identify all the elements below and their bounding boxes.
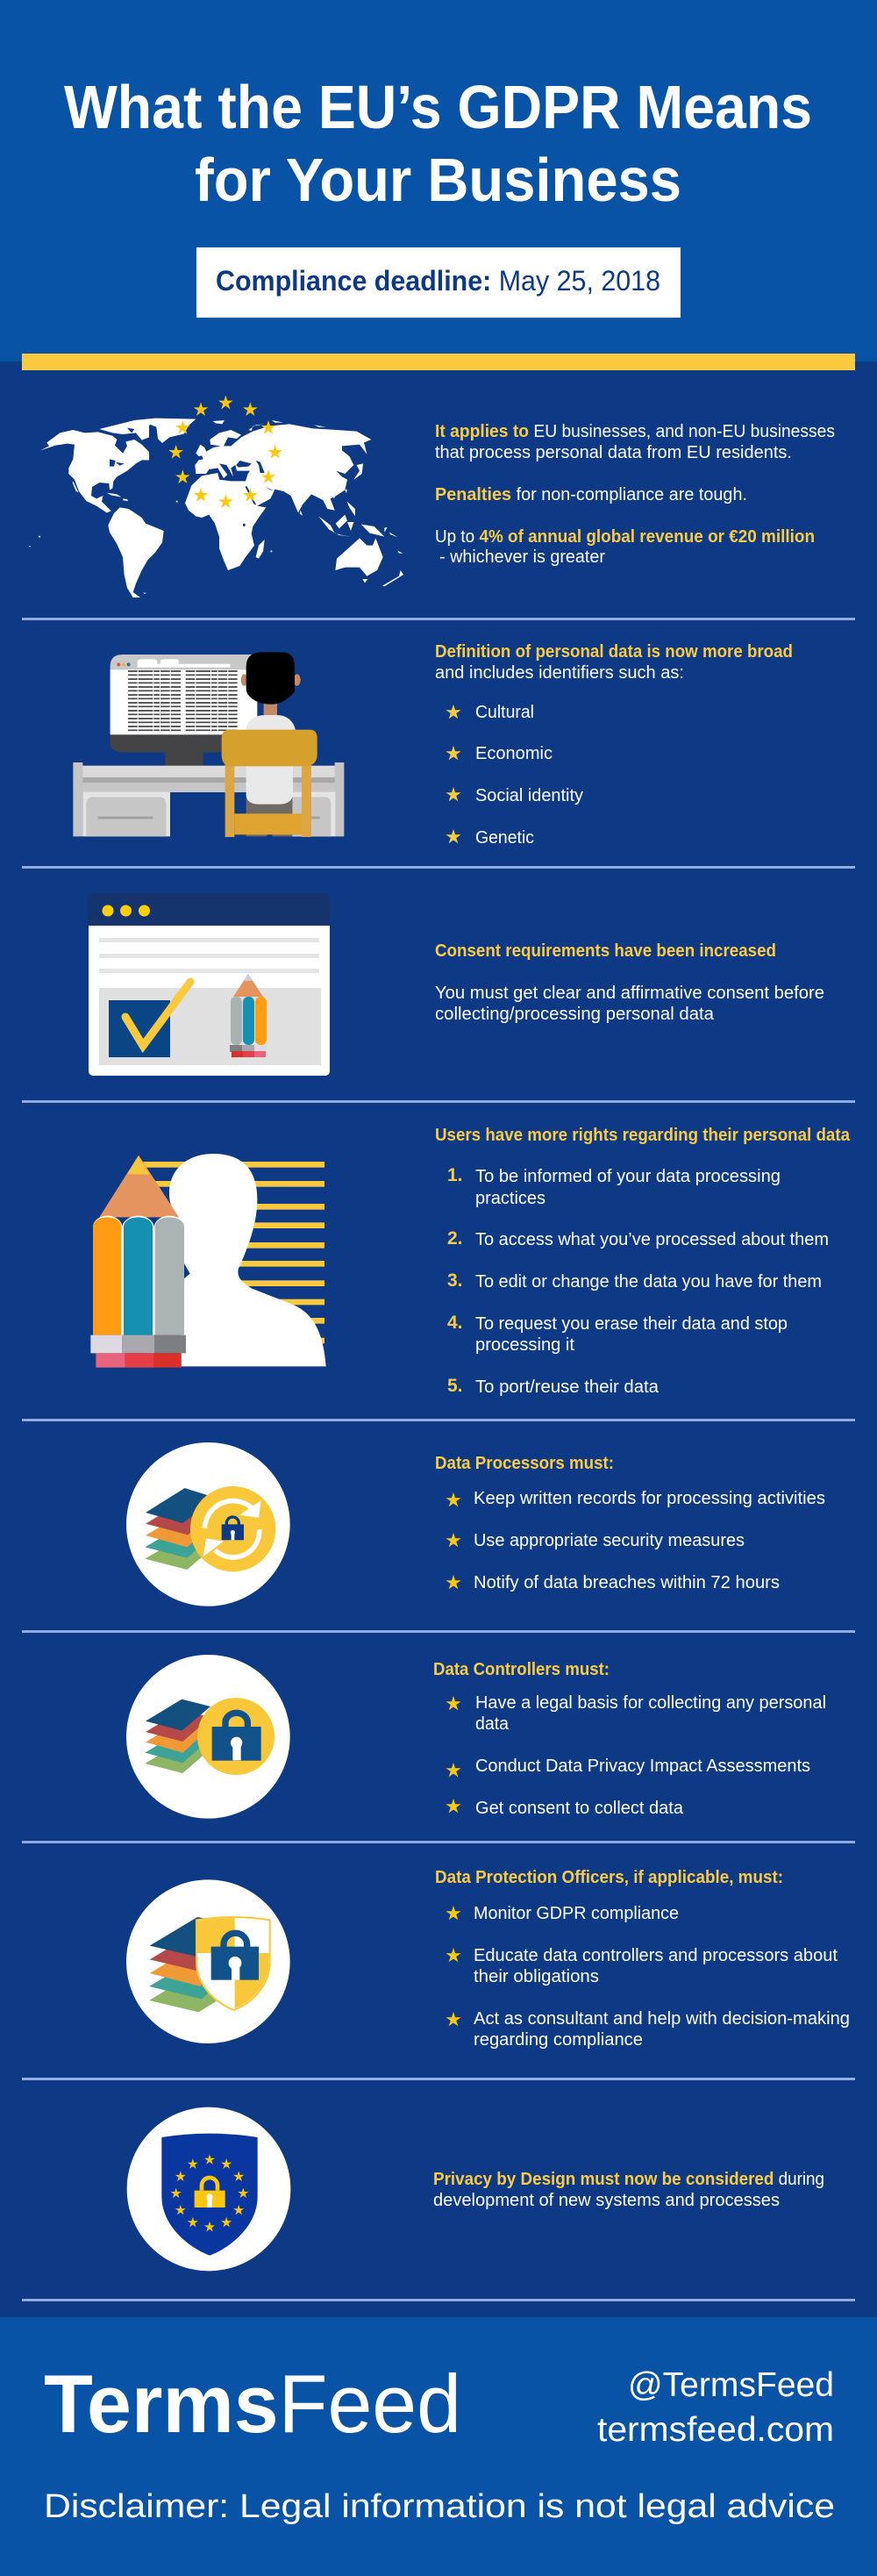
text: data protection officers list: Data Protection Officers, if applicable, must: <box>435 1868 783 1887</box>
social handle and website: @TermsFeed <box>628 2366 834 2404</box>
icon: pencil and person silhouette <box>90 1154 326 1368</box>
text: privacy by design: development of new systems and processes <box>433 2191 780 2210</box>
text: data controllers list: Conduct Data Privacy Impact Assessments <box>475 1757 810 1776</box>
text: personal data definition: and includes identifiers such as: <box>435 663 684 683</box>
disclaimer: Disclaimer: Legal information is not legal advice <box>44 2488 835 2525</box>
text: data controllers list <box>433 1660 826 1818</box>
text: personal data definition: Social identity <box>475 786 583 805</box>
text: user rights list: To be informed of your data processing <box>475 1167 781 1186</box>
icon: layers with padlock <box>126 1655 290 1819</box>
title: What the EU’s GDPR Means <box>64 73 812 141</box>
text: data processors list: Notify of data breaches within 72 hours <box>474 1573 780 1592</box>
text: user rights list: Users have more rights regarding their personal data <box>435 1126 851 1145</box>
text: data controllers list: data <box>475 1714 510 1734</box>
text: data processors list: Use appropriate security measures <box>474 1531 745 1550</box>
panel: data controllers <box>126 1655 826 1819</box>
yellow divider bar <box>22 354 855 370</box>
text: consent <box>435 941 824 1024</box>
text: scope and penalties: Up to 4% of annual global revenue or €20 million <box>435 527 815 547</box>
text: user rights list: To edit or change the data you have for them <box>475 1272 822 1292</box>
icon: layers with sync lock <box>126 1442 290 1606</box>
title: for Your Business <box>195 146 681 214</box>
text: user rights list: To port/reuse their data <box>475 1377 660 1397</box>
icon: layers with shield <box>126 1879 290 2043</box>
text: user rights list: 1. <box>447 1165 463 1185</box>
text: scope and penalties: It applies to EU businesses, and non-EU businesses <box>435 422 835 441</box>
text: consent: You must get clear and affirmative consent before <box>435 984 824 1003</box>
text: data controllers list: Have a legal basis for collecting any personal <box>475 1693 826 1713</box>
text: data protection officers list: their obligations <box>474 1967 599 1986</box>
text: user rights list: processing it <box>475 1335 574 1355</box>
text: data protection officers list: Act as consultant and help with decision-making <box>474 2009 850 2029</box>
text: user rights list: To access what you’ve processed about them <box>475 1230 829 1249</box>
text: personal data definition <box>435 642 793 848</box>
panel: data processors <box>126 1442 825 1606</box>
text: user rights list: 3. <box>447 1270 463 1291</box>
text: data protection officers list: Monitor GDPR compliance <box>474 1904 679 1923</box>
footer band <box>0 2317 877 2576</box>
header band <box>0 0 877 361</box>
text: scope and penalties <box>435 422 835 567</box>
text: scope and penalties: - whichever is greater <box>439 547 605 567</box>
title <box>64 73 812 214</box>
text: consent: collecting/processing personal data <box>435 1005 715 1024</box>
panel: scope and penalties <box>29 396 835 597</box>
text: personal data definition: Definition of personal data is now more broad <box>435 642 793 662</box>
panel: user rights <box>90 1126 851 1397</box>
compliance deadline box: Compliance deadline: May 25, 2018 <box>216 265 660 297</box>
text: user rights list <box>435 1126 851 1397</box>
text: user rights list: practices <box>475 1189 545 1208</box>
icon: person at computer <box>73 652 344 837</box>
text: user rights list: 5. <box>447 1376 463 1396</box>
text: scope and penalties: that process personal data from EU residents. <box>435 443 792 462</box>
text: user rights list: 4. <box>447 1313 463 1333</box>
compliance deadline box <box>196 247 681 318</box>
text: data processors list: Data Processors must: <box>435 1454 614 1473</box>
logo: TermsFeed: TermsFeed <box>44 2358 461 2450</box>
text: data processors list <box>435 1454 825 1592</box>
social handle and website: termsfeed.com <box>597 2411 834 2449</box>
icon: world map with EU stars <box>29 396 403 597</box>
icon: EU shield with padlock <box>127 2107 290 2271</box>
text: data processors list: Keep written records for processing activities <box>474 1489 825 1508</box>
panel: data protection officers <box>126 1868 850 2050</box>
social handle and website <box>597 2366 834 2449</box>
text: privacy by design <box>433 2170 824 2210</box>
text: scope and penalties: Penalties for non-compliance are tough. <box>435 485 747 504</box>
text: user rights list: 2. <box>447 1228 463 1249</box>
text: privacy by design: Privacy by Design must now be considered during <box>433 2170 824 2189</box>
icon: consent form window <box>88 893 330 1076</box>
panel: personal data definition <box>73 642 793 848</box>
text: personal data definition: Genetic <box>475 828 534 848</box>
text: data controllers list: Get consent to collect data <box>475 1799 684 1818</box>
text: data controllers list: Data Controllers must: <box>433 1660 610 1679</box>
text: data protection officers list <box>435 1868 850 2050</box>
panel: consent <box>88 893 824 1076</box>
text: data protection officers list: Educate data controllers and processors about <box>474 1946 838 1965</box>
panel: privacy by design <box>127 2107 824 2271</box>
text: personal data definition: Cultural <box>475 703 534 722</box>
text: personal data definition: Economic <box>475 744 553 763</box>
text: user rights list: To request you erase their data and stop <box>475 1314 788 1334</box>
text: consent: Consent requirements have been increased <box>435 941 776 961</box>
text: data protection officers list: regarding compliance <box>474 2030 643 2050</box>
